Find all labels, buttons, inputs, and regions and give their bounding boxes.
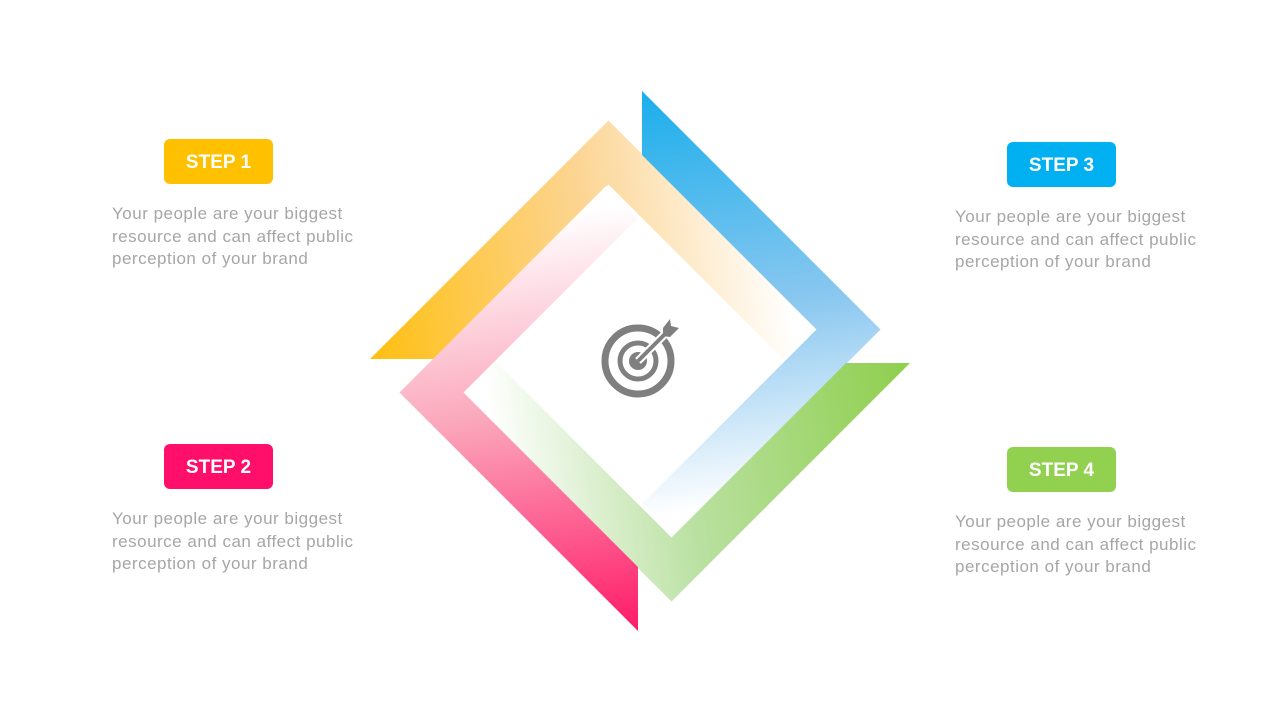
icon: target with arrow bbox=[605, 319, 679, 394]
badge: STEP 4: STEP 4 bbox=[1029, 460, 1094, 481]
text: step 3 description: perception of your brand bbox=[955, 252, 1151, 271]
text: step 3 description: Your people are your biggest bbox=[955, 207, 1186, 226]
badge: STEP 3 bbox=[1007, 142, 1116, 187]
text: step 2 description: perception of your brand bbox=[112, 554, 308, 573]
text: step 4 description: resource and can affect public bbox=[955, 534, 1196, 554]
text: step 3 description: resource and can affect public bbox=[955, 230, 1196, 248]
text: step 3 description bbox=[955, 207, 1196, 271]
arm: pink (step 2) bbox=[400, 186, 638, 631]
badge: STEP 2 bbox=[164, 444, 273, 489]
text: step 1 description: resource and can affect public bbox=[112, 226, 354, 246]
text: step 4 description bbox=[955, 512, 1196, 576]
arm: green (step 4) bbox=[465, 363, 910, 602]
badge: STEP 4 bbox=[1007, 447, 1116, 492]
text: step 2 description: resource and can affect public bbox=[112, 532, 354, 550]
text: step 1 description bbox=[112, 204, 354, 268]
arm: blue (step 3) bbox=[642, 91, 880, 536]
badge: STEP 1: STEP 1 bbox=[186, 152, 251, 173]
badge: STEP 1 bbox=[164, 139, 273, 184]
text: step 4 description: perception of your brand bbox=[955, 557, 1151, 576]
text: step 1 description: Your people are your biggest bbox=[112, 204, 343, 223]
text: step 2 description bbox=[112, 509, 354, 573]
badge: STEP 3: STEP 3 bbox=[1029, 155, 1094, 176]
arm: orange (step 1) bbox=[370, 120, 815, 359]
text: step 4 description: Your people are your biggest bbox=[955, 512, 1186, 531]
text: step 2 description: Your people are your biggest bbox=[112, 509, 343, 528]
badge: STEP 2: STEP 2 bbox=[186, 457, 251, 478]
text: step 1 description: perception of your brand bbox=[112, 249, 308, 268]
